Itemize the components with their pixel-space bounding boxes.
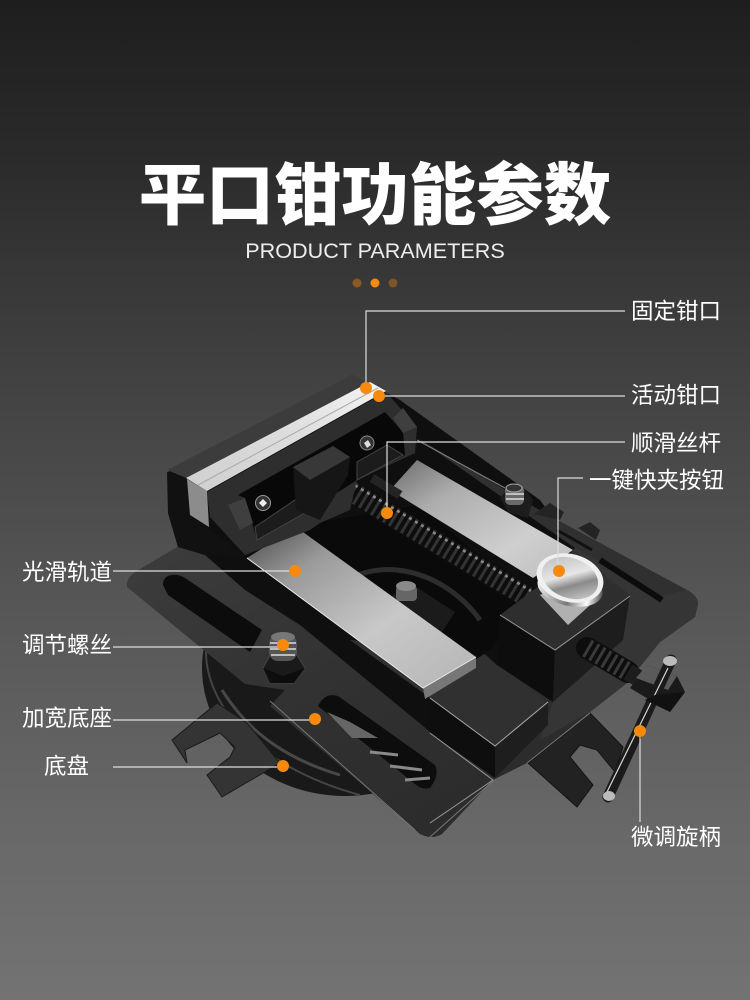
callout: 固定钳口 — [360, 299, 721, 394]
front slot — [318, 695, 437, 788]
hex rod end over handle — [645, 692, 685, 712]
back top surface — [167, 375, 370, 478]
decorative dots under subtitle — [352, 278, 398, 288]
lead screw — [327, 471, 531, 597]
callout: 光滑轨道 — [22, 560, 301, 585]
callout: 一键快夹按钮: 一键快夹按钮 — [589, 468, 724, 493]
black body band — [168, 375, 575, 740]
callout: 活动钳口: 活动钳口 — [631, 383, 721, 408]
left body side — [167, 472, 245, 557]
fixed jaw silver face — [186, 382, 386, 491]
callout: 调节螺丝 — [22, 633, 289, 658]
callout: 活动钳口 — [373, 383, 721, 408]
lower left bracket — [255, 500, 310, 540]
handle bar — [603, 656, 677, 801]
right rim — [417, 438, 687, 600]
title: 平口钳功能参数 — [139, 159, 611, 234]
callout: 固定钳口: 固定钳口 — [631, 299, 721, 324]
swivel disc — [202, 540, 488, 796]
adjustment bolt — [263, 632, 305, 683]
left chamfer — [228, 498, 253, 530]
movable jaw block — [207, 392, 417, 555]
callout: 微调旋柄: 微调旋柄 — [631, 825, 721, 850]
callout: 顺滑丝杆: 顺滑丝杆 — [631, 431, 721, 456]
quick release button — [531, 546, 609, 625]
callout: 加宽底座: 加宽底座 — [22, 706, 112, 731]
step platform — [350, 640, 548, 823]
callout: 顺滑丝杆 — [381, 431, 721, 519]
bench vise illustration — [127, 375, 698, 837]
right fork lug — [528, 713, 623, 807]
callout: 底盘 — [44, 754, 289, 779]
nut block — [497, 580, 630, 702]
base plate — [127, 512, 698, 837]
left fork lug — [172, 703, 280, 797]
fine adjustment screw and hex — [587, 648, 685, 712]
fixed jaw silver side — [187, 479, 209, 527]
callout: 光滑轨道: 光滑轨道 — [22, 560, 112, 585]
jaw recess — [238, 412, 405, 540]
subtitle: PRODUCT PARAMETERS — [245, 238, 505, 263]
callout: 底盘: 底盘 — [44, 754, 89, 779]
left slot — [163, 575, 262, 652]
callout: 微调旋柄 — [631, 725, 721, 850]
jaw screws — [256, 496, 270, 510]
back bolt and small lugs — [500, 484, 600, 540]
right plate surface — [540, 530, 698, 740]
callout: 调节螺丝: 调节螺丝 — [22, 633, 112, 658]
plate highlights — [270, 701, 590, 837]
right rail — [390, 460, 573, 578]
callout: 加宽底座 — [22, 706, 321, 731]
left rail — [247, 527, 476, 699]
lower right bracket — [357, 445, 403, 480]
central boss — [293, 446, 350, 520]
inner cavity disc and centre bolt — [300, 505, 530, 690]
callout: 一键快夹按钮 — [553, 468, 724, 577]
right chamfer — [393, 408, 417, 433]
